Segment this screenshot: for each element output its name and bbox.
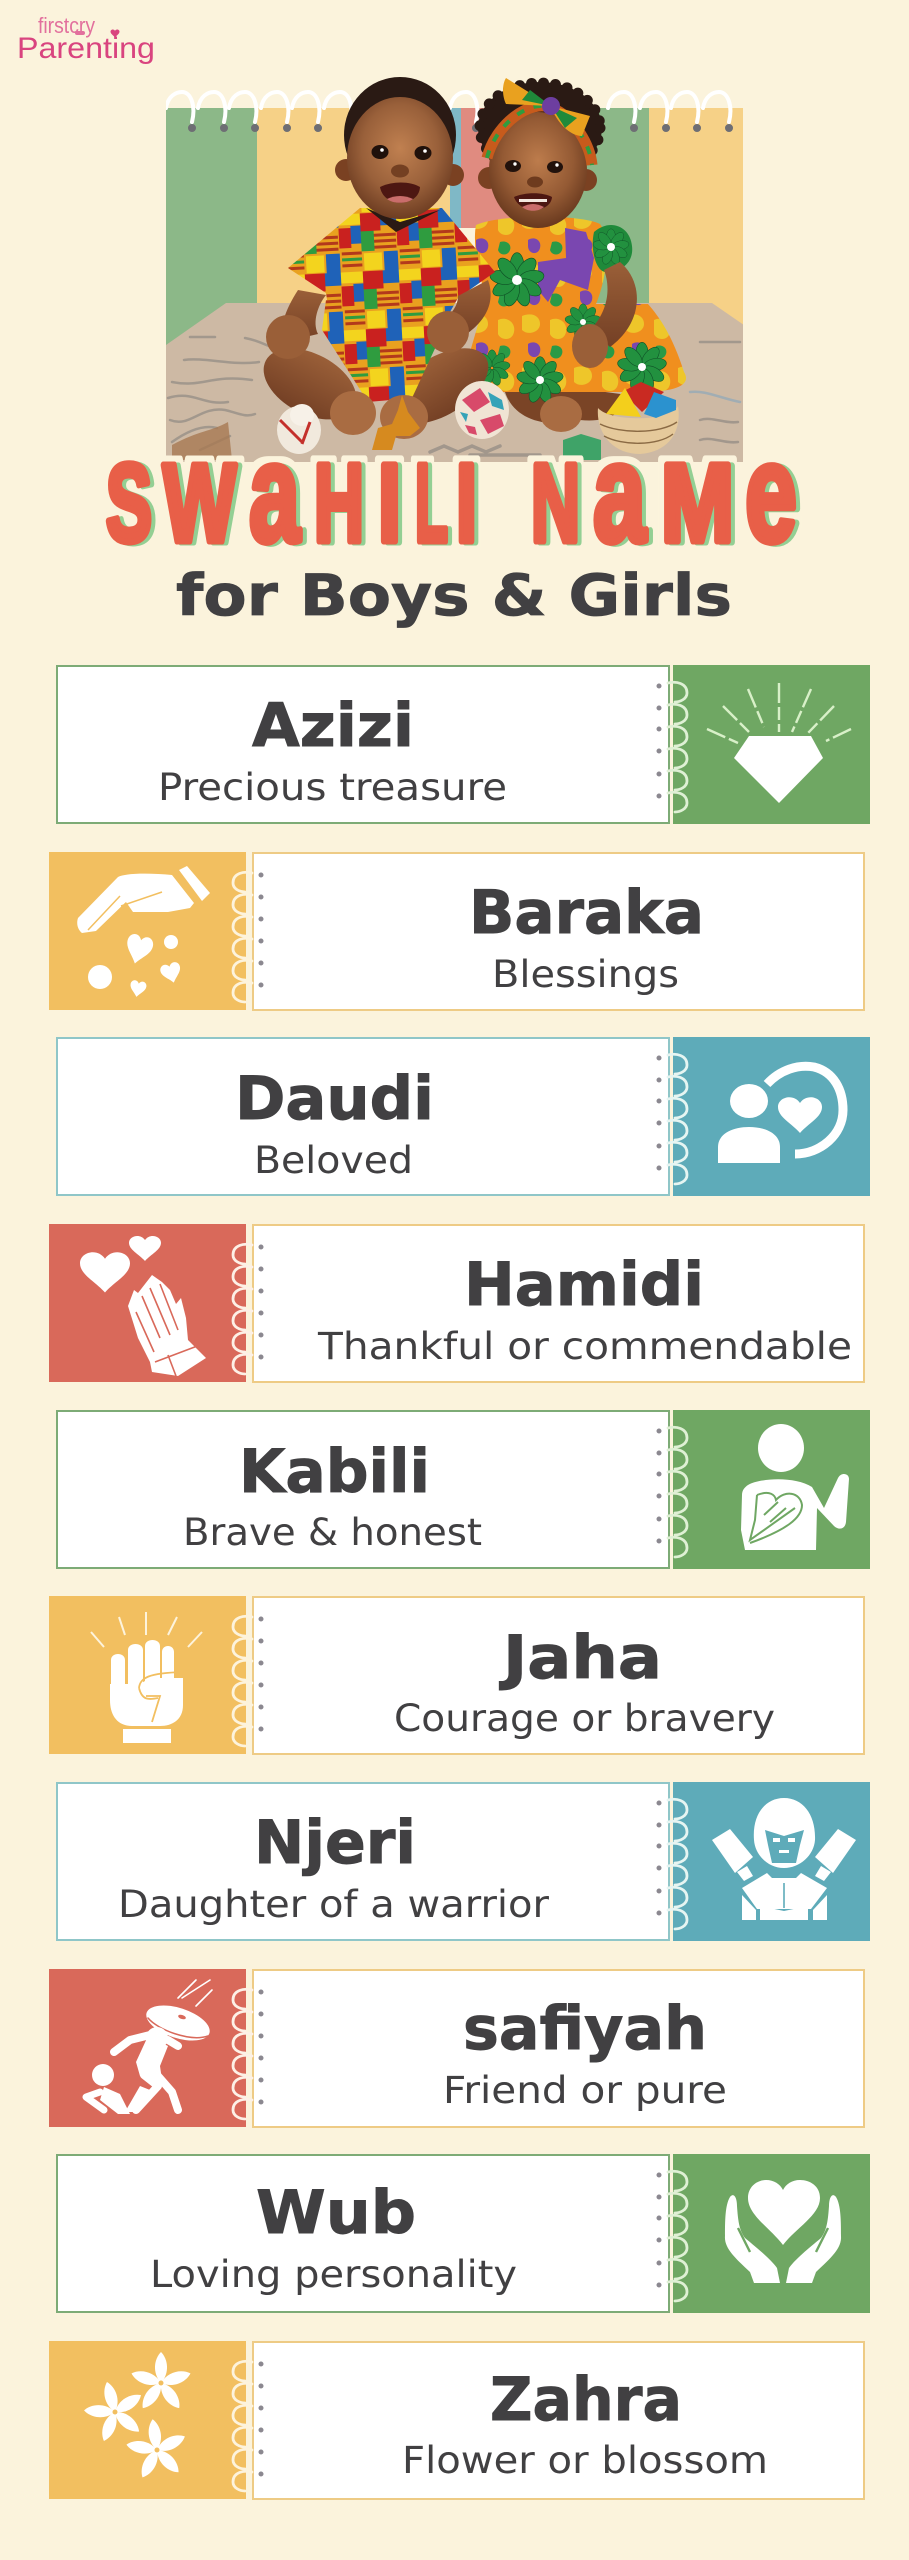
row: Daudi xyxy=(57,1037,870,1196)
title: Swahili Name: e xyxy=(745,414,797,571)
floor rug xyxy=(166,303,744,462)
logo: FirstCry Parenting: firstcry xyxy=(38,13,95,38)
icon panel xyxy=(673,1410,870,1569)
icon: heart held in hands xyxy=(725,2180,841,2283)
name card xyxy=(253,1970,864,2127)
spiral binding xyxy=(233,1244,261,1374)
name card xyxy=(253,1225,864,1382)
name card xyxy=(57,666,669,823)
meaning: Beloved xyxy=(254,1139,413,1182)
row: Wub xyxy=(57,2154,870,2313)
meaning: Courage or bravery xyxy=(394,1697,775,1740)
name card xyxy=(57,2155,669,2312)
title: Swahili Name: a xyxy=(249,414,301,571)
meaning: Friend or pure xyxy=(443,2069,727,2112)
spiral binding xyxy=(659,1054,687,1184)
icon panel xyxy=(49,2341,246,2499)
icon panel xyxy=(49,1596,246,1754)
spiral binding xyxy=(659,1799,687,1929)
icon panel xyxy=(673,1782,870,1941)
title: Swahili Name: S xyxy=(106,442,152,565)
icon panel xyxy=(673,665,870,824)
row: Hamidi xyxy=(49,1224,864,1382)
title: Swahili Name: I xyxy=(456,442,477,565)
name: Hamidi xyxy=(464,1250,704,1320)
icon panel xyxy=(49,1224,246,1382)
icon panel xyxy=(673,2154,870,2313)
icon: person and heart xyxy=(718,1066,843,1163)
spiral binding xyxy=(659,2171,687,2301)
row: Zahra xyxy=(49,2341,864,2499)
icon: praying hands and hearts xyxy=(80,1236,206,1376)
icon: warrior with swords xyxy=(712,1798,856,1920)
name card xyxy=(57,1783,669,1940)
icon: person with hand on heart xyxy=(741,1424,849,1550)
row: Azizi xyxy=(57,665,870,824)
meaning: Daughter of a warrior xyxy=(118,1883,550,1926)
logo: FirstCry Parenting: Parenting xyxy=(17,32,155,65)
row: Baraka xyxy=(49,852,864,1010)
girl baby xyxy=(465,78,686,432)
title: Swahili Name: a xyxy=(593,414,647,571)
name: Baraka xyxy=(469,878,704,948)
logo: FirstCry Parenting xyxy=(17,13,155,65)
row: Kabili xyxy=(57,1410,870,1569)
icon panel xyxy=(673,1037,870,1196)
icon: warrior shielding a friend xyxy=(86,1980,214,2114)
meaning: Loving personality xyxy=(150,2253,517,2296)
spiral binding xyxy=(659,1427,687,1557)
title: Swahili Name: W xyxy=(163,442,236,565)
name: Daudi xyxy=(235,1064,434,1134)
row: Njeri xyxy=(57,1782,870,1941)
name: safiyah xyxy=(463,1994,707,2064)
spiral binding xyxy=(233,872,261,1002)
icon panel xyxy=(49,852,246,1010)
spiral binding xyxy=(233,1616,261,1746)
meaning: Brave & honest xyxy=(183,1511,482,1554)
icon panel xyxy=(49,1969,246,2127)
meaning: Precious treasure xyxy=(158,766,507,809)
spiral binding xyxy=(233,2361,261,2491)
name: Azizi xyxy=(252,691,414,761)
toys: ball, lamb, giraffe, basket and blocks xyxy=(172,381,679,460)
binder rings xyxy=(166,92,730,128)
name: Kabili xyxy=(239,1437,430,1507)
subtitle: for Boys & Girls xyxy=(176,563,732,629)
name card xyxy=(57,1038,669,1195)
boy baby xyxy=(252,77,501,439)
title: Swahili Name: H xyxy=(314,442,364,565)
spiral binding xyxy=(659,682,687,812)
meaning: Thankful or commendable xyxy=(317,1325,852,1368)
name card xyxy=(57,1411,669,1568)
icon: three flowers xyxy=(77,2352,192,2483)
name card xyxy=(253,1597,864,1754)
title: Swahili Name: L xyxy=(415,442,448,565)
icon: raised fist xyxy=(91,1612,202,1743)
meaning: Flower or blossom xyxy=(402,2439,768,2482)
icon: diamond xyxy=(707,683,851,803)
icon: hand dropping hearts xyxy=(77,866,210,998)
title: Swahili Name: M xyxy=(661,442,734,565)
row: Jaha xyxy=(49,1596,864,1754)
title: Swahili Name: I xyxy=(378,442,401,565)
name card xyxy=(253,853,864,1010)
spiral binding xyxy=(233,1989,261,2119)
hero photo: two smiling babies in African print outfits xyxy=(166,77,744,462)
backdrop colour stripes xyxy=(166,108,744,348)
name card xyxy=(253,2342,864,2499)
name: Wub xyxy=(256,2178,416,2248)
title: Swahili Name: N xyxy=(531,442,580,565)
name: Njeri xyxy=(254,1808,416,1878)
meaning: Blessings xyxy=(492,953,679,996)
row: safiyah xyxy=(49,1969,864,2127)
name: Zahra xyxy=(490,2365,682,2435)
name: Jaha xyxy=(499,1623,662,1693)
